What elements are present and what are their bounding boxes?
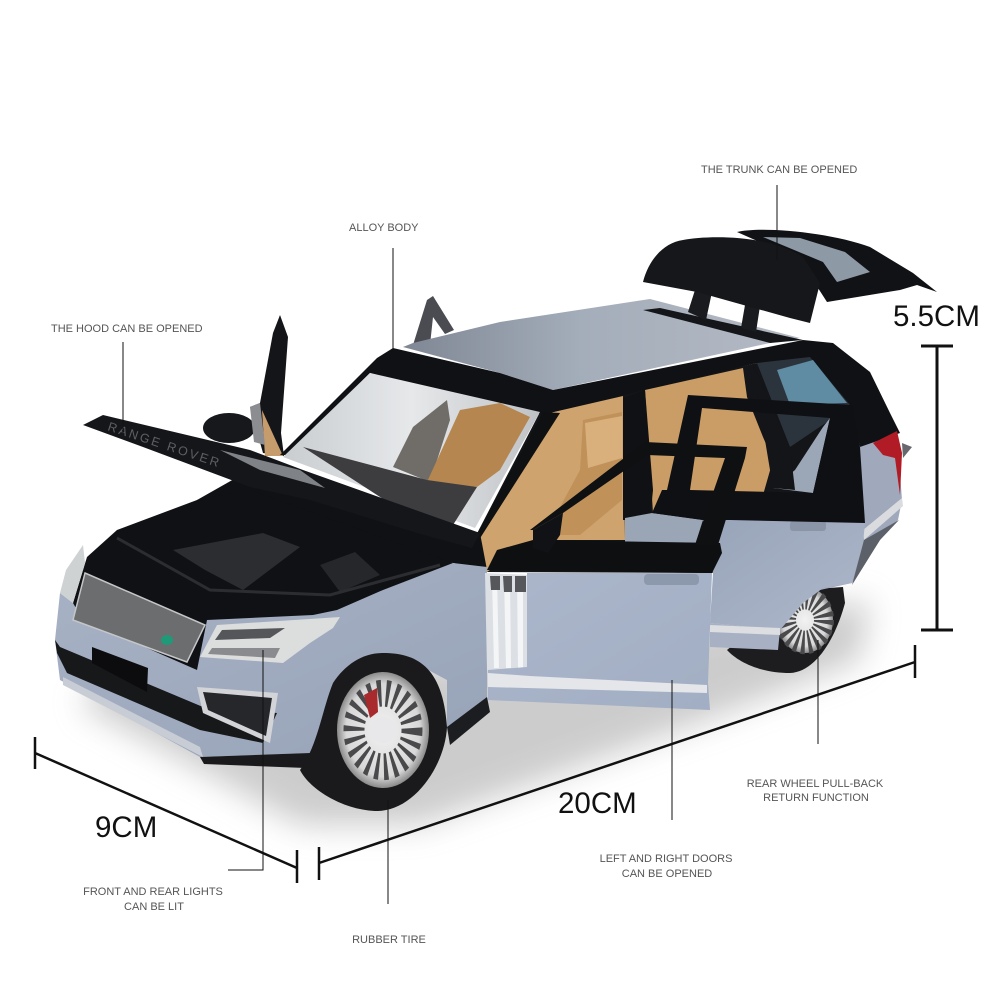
black roof rails and rear pillar	[280, 308, 900, 455]
dimension: 5.5CM: 5.5CM	[893, 300, 980, 333]
callout: rear wheel	[747, 640, 884, 804]
A pillar	[470, 412, 560, 547]
rear sill	[710, 623, 780, 650]
interior tan rear	[645, 368, 773, 513]
windshield	[283, 373, 540, 528]
dimension: 9CM: 9CM	[95, 811, 157, 844]
front door vent	[485, 573, 530, 670]
interior backing	[470, 363, 862, 573]
trunk lid inner	[643, 237, 820, 323]
B pillar	[623, 390, 653, 520]
roof	[403, 299, 800, 390]
dimension: 20CM: 20CM	[558, 787, 637, 820]
front bumper	[55, 640, 278, 757]
lower front body	[55, 563, 487, 757]
callout: doors: CAN BE OPENED	[622, 868, 712, 880]
callout: alloy body	[349, 222, 419, 360]
callout: lights: FRONT AND REAR LIGHTS	[83, 886, 223, 898]
callout: lights: CAN BE LIT	[124, 901, 184, 913]
rear door panel	[702, 515, 865, 630]
under body dark	[200, 697, 490, 768]
trunk lid outer	[737, 230, 937, 302]
ground shadow	[80, 600, 870, 825]
side mirror	[533, 513, 563, 553]
front door handle	[644, 574, 699, 585]
callout: doors: LEFT AND RIGHT DOORS	[600, 853, 732, 865]
hood	[83, 415, 480, 548]
dimension: 9CM	[35, 737, 297, 883]
far side open door	[413, 296, 454, 345]
callout: lights	[83, 650, 263, 913]
callout: rubber tire: RUBBER TIRE	[352, 934, 426, 946]
front grille	[73, 573, 205, 662]
callout: rear wheel: RETURN FUNCTION	[763, 792, 869, 804]
engine bay	[73, 490, 453, 670]
under-hood dark cavity	[197, 470, 487, 570]
rear glass	[757, 357, 850, 447]
inner grey sill	[625, 364, 830, 545]
front door belt	[487, 540, 722, 573]
open left door with mirror	[203, 315, 288, 456]
left headlight	[60, 545, 85, 603]
callout: doors	[600, 680, 732, 880]
tail light	[873, 431, 902, 495]
front wheel	[300, 653, 447, 811]
callout: rear wheel: REAR WHEEL PULL-BACK	[747, 778, 884, 790]
callout: trunk: THE TRUNK CAN BE OPENED	[701, 164, 857, 176]
dimension: 5.5CM	[893, 300, 980, 630]
rear door frame	[652, 395, 865, 523]
front door sill chrome	[488, 673, 707, 693]
hood: RANGE ROVER	[106, 420, 223, 471]
front door window frame	[530, 442, 747, 545]
callout: alloy body: ALLOY BODY	[349, 222, 419, 234]
rear quarter body	[820, 433, 912, 590]
interior tan front	[545, 412, 622, 535]
callout: hood: THE HOOD CAN BE OPENED	[51, 323, 203, 335]
open front door panel	[488, 573, 712, 710]
dimension: 20CM	[319, 645, 915, 880]
rear wheel	[727, 587, 845, 673]
headlight	[200, 617, 340, 663]
trunk hinges	[688, 290, 760, 332]
panel: car model	[55, 230, 937, 825]
